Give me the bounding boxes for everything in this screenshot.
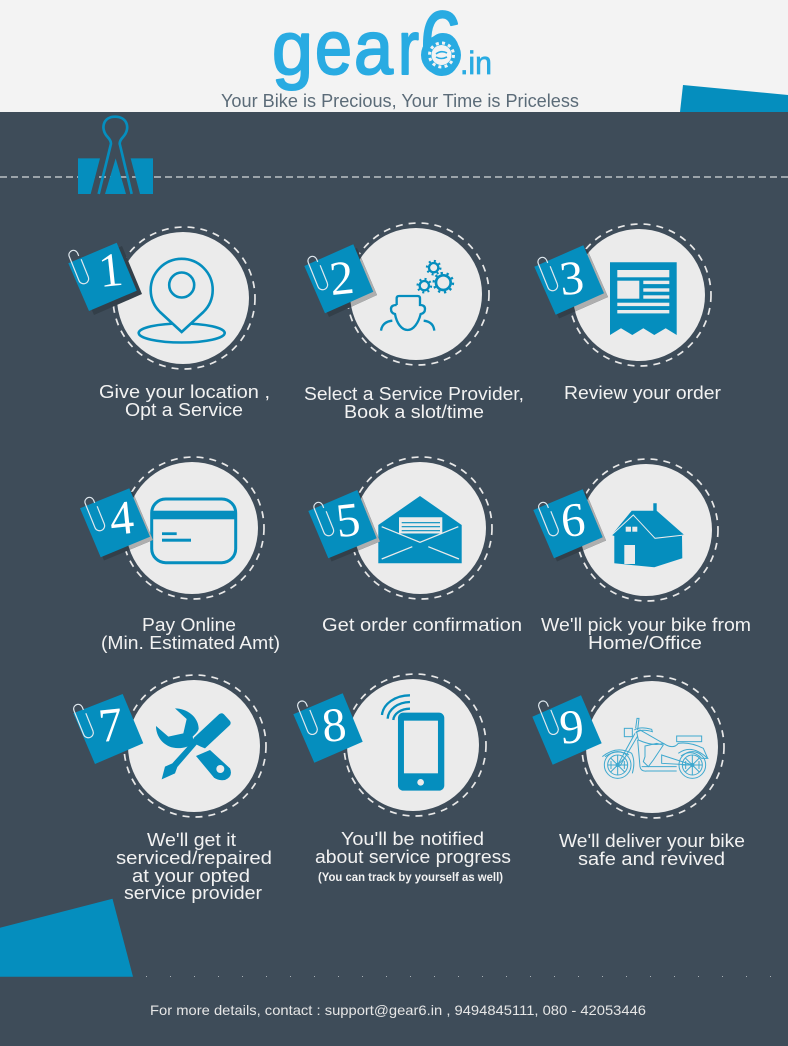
caption 7: We'll get it (147, 830, 236, 850)
number tag 3 (534, 245, 608, 318)
caption 7: at your opted (132, 866, 250, 886)
circle 6 (580, 464, 712, 596)
icon: binder clip (78, 117, 153, 194)
number tag 5: 5 (333, 493, 363, 548)
header band (0, 0, 788, 112)
number tag 8: 8 (319, 698, 349, 753)
circle 5 (354, 462, 486, 594)
number tag 4: 4 (107, 491, 136, 546)
step 9 (532, 676, 745, 869)
number tag 2 (304, 244, 377, 317)
caption 4: Pay Online (142, 615, 236, 635)
step 7 (72, 675, 272, 903)
circle 9 (586, 681, 718, 813)
caption 4: (Min. Estimated Amt) (101, 633, 280, 653)
step 8 (293, 674, 511, 884)
caption 9 (559, 831, 745, 869)
number tag 1: 1 (96, 243, 125, 298)
number tag 2: 2 (327, 251, 356, 306)
logo: a (354, 6, 394, 91)
logo: .in (460, 45, 492, 81)
step 6 (533, 459, 751, 653)
icon: house (612, 503, 684, 567)
caption 9: We'll deliver your bike (559, 831, 745, 851)
icon: envelope (378, 496, 462, 563)
number tag 9: 9 (557, 700, 586, 755)
icon: person with gears (381, 261, 453, 331)
circle 2 (350, 228, 482, 360)
caption 7: serviced/repaired (116, 848, 272, 868)
caption 1: Give your location , (99, 382, 270, 402)
number tag 5 (308, 490, 380, 562)
number tag 9 (532, 695, 602, 765)
circle 3 (573, 229, 705, 361)
circle 4 (126, 462, 258, 594)
step 1 (68, 227, 270, 420)
caption 6: We'll pick your bike from (541, 615, 751, 635)
caption 8: (You can track by yourself as well) (318, 870, 503, 884)
caption 3: Review your order (564, 383, 721, 403)
caption 9: safe and revived (578, 849, 725, 869)
step 2 (304, 223, 524, 422)
number tag 6 (533, 489, 606, 562)
dotted footer divider (146, 976, 788, 978)
caption 8: You'll be notified (341, 829, 484, 849)
number tag 1 (68, 243, 142, 315)
icon: smartphone with signal (382, 695, 444, 791)
step 4 (80, 457, 280, 653)
number tag 4 (80, 488, 153, 560)
footer contact text: For more details, contact : support@gear6.in , 9494845111, 080 - 42053446 (150, 1002, 646, 1018)
caption 8 (315, 829, 511, 884)
icon: credit card (152, 499, 236, 563)
step 3 (534, 224, 721, 403)
caption 2: Book a slot/time (344, 402, 484, 422)
corner accent bottom left (0, 899, 133, 977)
corner accent top right (680, 85, 788, 112)
icon: motorbike (602, 718, 708, 778)
logo: e (315, 6, 352, 91)
number tag 6: 6 (558, 493, 588, 548)
caption 2 (304, 384, 524, 422)
caption 1: Opt a Service (125, 400, 243, 420)
icon: location pin (139, 259, 225, 342)
caption 8: about service progress (315, 847, 511, 867)
number tag 7: 7 (96, 698, 125, 753)
caption 7: service provider (124, 883, 262, 903)
number tag 7 (72, 694, 143, 764)
caption 6 (541, 615, 751, 653)
logo: g (272, 6, 313, 91)
number tag 8 (293, 693, 363, 763)
number tag 3: 3 (557, 251, 586, 306)
dashed divider (0, 176, 788, 178)
tagline: Your Bike is Precious, Your Time is Priceless (221, 91, 579, 111)
circle 1 (117, 232, 249, 364)
caption 4 (101, 615, 280, 653)
step 5 (308, 457, 522, 635)
caption 6: Home/Office (588, 633, 702, 653)
icon: wrench and screwdriver (156, 708, 231, 780)
caption 5: Get order confirmation (322, 615, 522, 635)
circle 7 (128, 680, 260, 812)
caption 2: Select a Service Provider, (304, 384, 524, 404)
icon: receipt (610, 262, 677, 335)
caption 7 (116, 830, 272, 903)
logo (272, 0, 492, 94)
caption 1 (99, 382, 270, 420)
logo: r (398, 6, 419, 91)
circle 8 (347, 679, 479, 811)
